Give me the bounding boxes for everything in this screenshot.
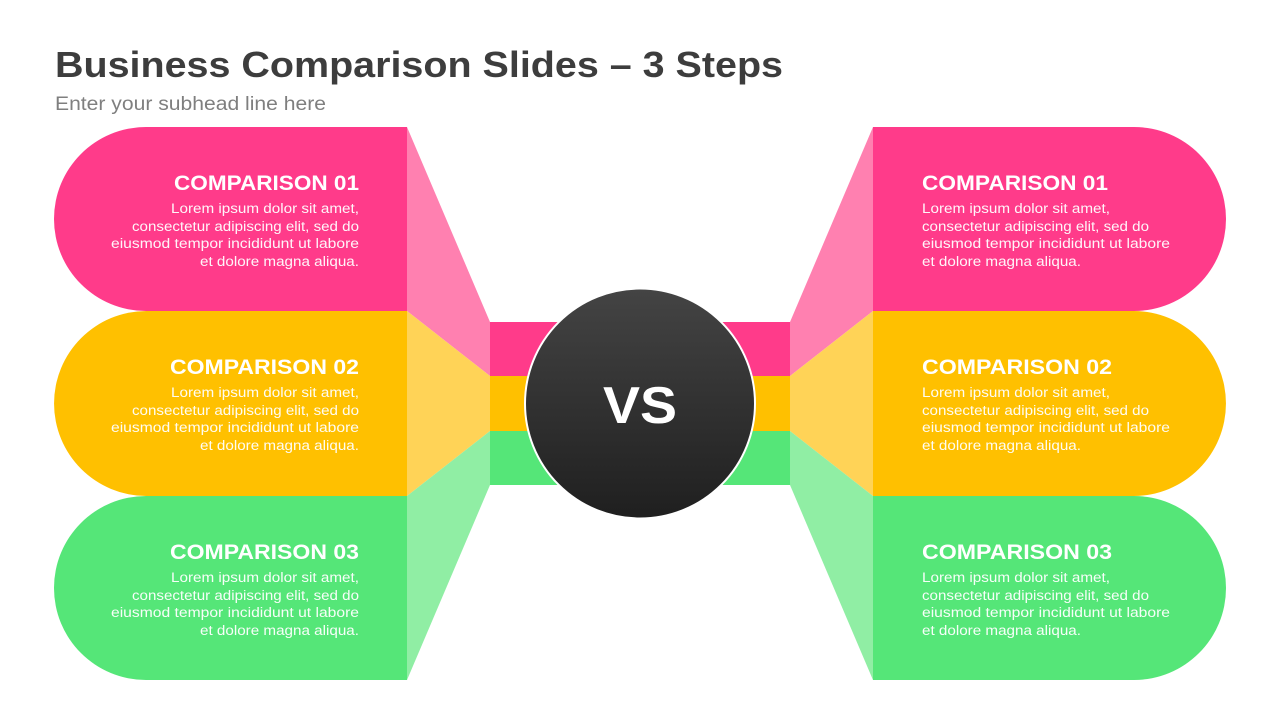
body text: Lorem ipsum dolor sit amet, <box>171 570 359 585</box>
body text: eiusmod tempor incididunt ut labore <box>922 236 1170 251</box>
pink connector left <box>407 127 490 376</box>
dark circle <box>525 288 755 518</box>
yellow pill right <box>873 311 1226 496</box>
panel: right comparison 01 <box>790 127 1226 376</box>
body text: consectetur adipiscing elit, sed do <box>132 403 359 418</box>
green pill right <box>873 496 1226 680</box>
center bars: left <box>490 322 570 485</box>
panel: left comparison 01 <box>54 127 490 376</box>
body text <box>111 201 359 269</box>
title: Business Comparison Slides – 3 Steps <box>55 44 783 85</box>
body text: Lorem ipsum dolor sit amet, <box>922 385 1110 400</box>
yellow connector right <box>790 311 873 496</box>
body text: et dolore magna aliqua. <box>200 623 359 638</box>
green pill left <box>54 496 407 680</box>
VS circle badge <box>525 288 755 518</box>
body text: Lorem ipsum dolor sit amet, <box>922 570 1110 585</box>
panel: right comparison 02 <box>790 311 1226 496</box>
panel: left comparison 03 <box>54 431 490 680</box>
heading: COMPARISON 03 <box>170 541 359 564</box>
yellow pill left <box>54 311 407 496</box>
body text: et dolore magna aliqua. <box>200 254 359 269</box>
pink connector right <box>790 127 873 376</box>
body text: Lorem ipsum dolor sit amet, <box>922 201 1110 216</box>
body text: eiusmod tempor incididunt ut labore <box>111 236 359 251</box>
heading: COMPARISON 02 <box>170 356 359 379</box>
body text: eiusmod tempor incididunt ut labore <box>111 420 359 435</box>
body text: et dolore magna aliqua. <box>922 254 1081 269</box>
body text: et dolore magna aliqua. <box>200 438 359 453</box>
body text <box>111 385 359 453</box>
heading: COMPARISON 02 <box>922 356 1112 379</box>
heading: COMPARISON 01 <box>174 172 359 195</box>
body text: consectetur adipiscing elit, sed do <box>922 588 1149 603</box>
panel: right comparison 03 <box>790 431 1226 680</box>
pink pill right <box>873 127 1226 311</box>
body text: consectetur adipiscing elit, sed do <box>922 403 1149 418</box>
body text: Lorem ipsum dolor sit amet, <box>171 385 359 400</box>
yellow connector left <box>407 311 490 496</box>
body text: consectetur adipiscing elit, sed do <box>132 588 359 603</box>
green connector right <box>790 431 873 680</box>
body text: eiusmod tempor incididunt ut labore <box>922 605 1170 620</box>
body text: et dolore magna aliqua. <box>922 438 1081 453</box>
body text: consectetur adipiscing elit, sed do <box>132 219 359 234</box>
body text <box>922 201 1170 269</box>
subtitle: Enter your subhead line here <box>55 94 326 115</box>
body text <box>922 385 1170 453</box>
VS label: VS <box>603 377 677 435</box>
body text: Lorem ipsum dolor sit amet, <box>171 201 359 216</box>
center bars: right <box>710 322 790 485</box>
pink pill left <box>54 127 407 311</box>
body text: et dolore magna aliqua. <box>922 623 1081 638</box>
body text <box>111 570 359 638</box>
heading: COMPARISON 01 <box>922 172 1108 195</box>
body text: eiusmod tempor incididunt ut labore <box>111 605 359 620</box>
body text: eiusmod tempor incididunt ut labore <box>922 420 1170 435</box>
body text <box>922 570 1170 638</box>
heading: COMPARISON 03 <box>922 541 1112 564</box>
body text: consectetur adipiscing elit, sed do <box>922 219 1149 234</box>
panel: left comparison 02 <box>54 311 490 496</box>
green connector left <box>407 431 490 680</box>
